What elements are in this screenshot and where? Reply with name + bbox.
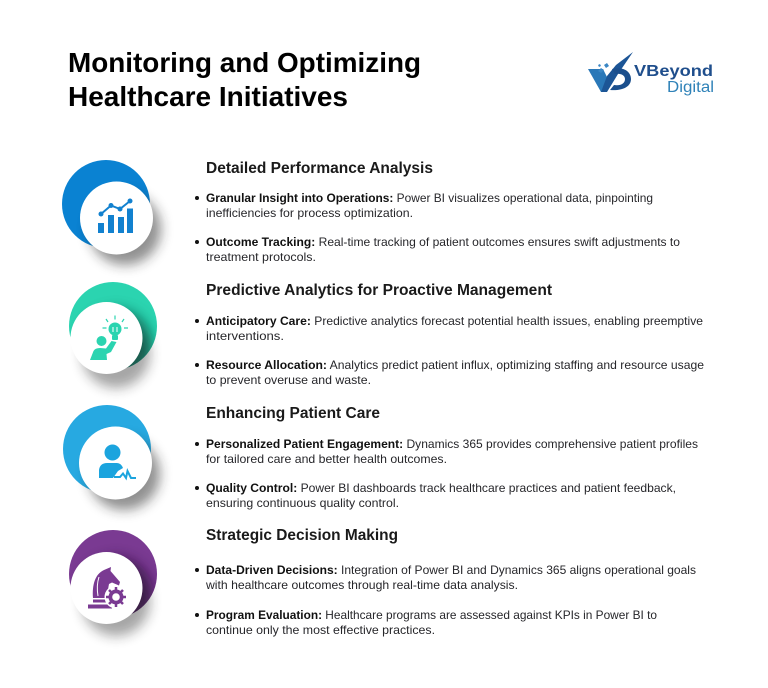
icon: bar chart with trend line bbox=[98, 198, 133, 233]
panel: strategic decision making icon bbox=[69, 530, 157, 636]
icon: patient with heartbeat bbox=[99, 444, 136, 478]
bullet: program evaluation: Program Evaluation: Healthcare programs are assessed against KPIs in Power BI to bbox=[206, 608, 657, 622]
bullet: quality control: ensuring continuous quality control. bbox=[206, 496, 399, 510]
panel: detailed performance analysis text bbox=[195, 160, 680, 264]
logo: VBeyond Digital: Digital bbox=[667, 79, 714, 96]
panel: enhancing patient care text bbox=[195, 405, 698, 510]
bullet: outcome tracking: Outcome Tracking: Real-time tracking of patient outcomes ensures swift adjustments to bbox=[206, 235, 680, 249]
bullet: quality control: Quality Control: Power BI dashboards track healthcare practices and patient feedback, bbox=[206, 481, 676, 495]
panel: detailed performance icon bbox=[62, 160, 161, 265]
bullet: granular insight: Granular Insight into Operations: Power BI visualizes operational data, pinpointing bbox=[206, 191, 653, 205]
bullet: data-driven decisions: with healthcare outcomes through real-time data analysis. bbox=[205, 578, 518, 592]
bullet: program evaluation: continue only the most effective practices. bbox=[206, 623, 435, 637]
bullet: granular insight bbox=[195, 191, 653, 220]
icon: chess knight with gear bbox=[88, 567, 128, 608]
title bbox=[68, 47, 421, 112]
heading: Strategic Decision Making bbox=[206, 527, 398, 544]
bullet: anticipatory care: interventions. bbox=[206, 329, 284, 343]
bullet: personalized engagement: for tailored care and better health outcomes. bbox=[206, 452, 447, 466]
logo: VBeyond Digital bbox=[588, 52, 714, 96]
panel: predictive analytics icon bbox=[69, 282, 157, 388]
icon: logo check mark bbox=[588, 52, 633, 92]
bullet: outcome tracking: treatment protocols. bbox=[206, 250, 316, 264]
heading: Detailed Performance Analysis bbox=[206, 160, 433, 177]
logo: VBeyond Digital: VBeyond bbox=[634, 63, 713, 80]
panel: strategic decision making text bbox=[195, 527, 696, 637]
title: Monitoring and Optimizing bbox=[68, 47, 421, 78]
icon: person holding light bulb bbox=[90, 316, 128, 360]
bullet: resource allocation: to prevent overuse and waste. bbox=[206, 373, 371, 387]
title: Healthcare Initiatives bbox=[68, 81, 348, 112]
heading: Enhancing Patient Care bbox=[206, 405, 380, 422]
bullet: outcome tracking bbox=[195, 235, 680, 264]
bullet: data-driven decisions bbox=[195, 563, 696, 592]
panel: enhancing patient care icon bbox=[63, 405, 160, 510]
bullet: resource allocation bbox=[195, 358, 704, 387]
bullet: quality control bbox=[195, 481, 676, 510]
bullet: granular insight: inefficiencies for process optimization. bbox=[206, 206, 413, 220]
bullet: program evaluation bbox=[195, 608, 657, 637]
panel: predictive analytics text bbox=[195, 282, 704, 387]
bullet: data-driven decisions: Data-Driven Decisions: Integration of Power BI and Dynamics 365 aligns operational goals bbox=[206, 563, 696, 577]
bullet: anticipatory care: Anticipatory Care: Predictive analytics forecast potential health issues, enabling preemptive bbox=[206, 314, 703, 328]
bullet: resource allocation: Resource Allocation: Analytics predict patient influx, optimizing staffing and resource usage bbox=[206, 358, 704, 372]
bullet: personalized engagement: Personalized Patient Engagement: Dynamics 365 provides comprehensive patient profiles bbox=[206, 437, 698, 451]
heading: Predictive Analytics for Proactive Management bbox=[206, 282, 552, 299]
bullet: anticipatory care bbox=[195, 314, 703, 343]
bullet: personalized engagement bbox=[195, 437, 698, 466]
